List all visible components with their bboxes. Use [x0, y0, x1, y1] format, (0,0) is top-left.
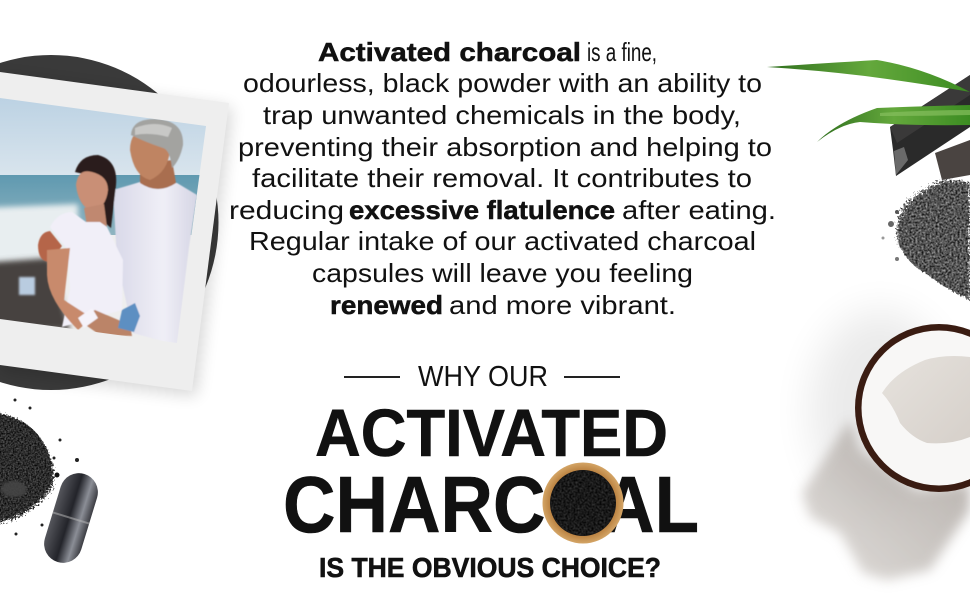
intro paragraph: trap unwanted chemicals in the body,	[263, 100, 741, 130]
water bottle	[118, 303, 140, 332]
charcoal powder left	[0, 398, 79, 536]
dark circle behind photo	[0, 55, 218, 390]
intro paragraph: Activated charcoal	[318, 37, 581, 67]
intro paragraph: and more vibrant.	[449, 290, 676, 320]
photo frame	[0, 72, 232, 396]
intro paragraph: after eating.	[622, 195, 776, 225]
shadow of coconut	[802, 310, 970, 580]
icon: capsule	[39, 468, 103, 568]
charcoal sticks	[890, 75, 970, 180]
heading: is the obvious choice: IS THE OBVIOUS CHOICE?	[319, 552, 661, 583]
icon: green leaves	[767, 60, 970, 142]
intro paragraph: renewed	[330, 290, 443, 320]
intro paragraph: is a fine,	[587, 37, 657, 67]
intro paragraph: reducing	[229, 195, 344, 225]
heading: why our: WHY OUR	[418, 361, 548, 393]
intro paragraph: excessive flatulence	[349, 195, 615, 225]
heading: charcoal with bowl: CHARCOAL	[283, 460, 699, 549]
woman hair	[75, 155, 116, 228]
icon: wooden bowl of charcoal	[542, 462, 624, 544]
intro paragraph: Regular intake of our activated charcoal	[249, 226, 756, 256]
man's arm	[38, 231, 62, 262]
intro paragraph: preventing their absorption and helping to	[238, 132, 772, 162]
photo: couple on the beach	[0, 90, 210, 345]
intro paragraph	[229, 37, 776, 320]
heading: activated: ACTIVATED	[315, 396, 668, 471]
intro paragraph: odourless, black powder with an ability to	[243, 68, 762, 98]
charcoal powder pile	[882, 180, 970, 300]
man	[38, 119, 197, 345]
icon: coconut half	[855, 324, 970, 492]
woman top	[50, 212, 123, 327]
intro paragraph: facilitate their removal. It contributes to	[252, 163, 752, 193]
intro paragraph: capsules will leave you feeling	[312, 258, 693, 288]
